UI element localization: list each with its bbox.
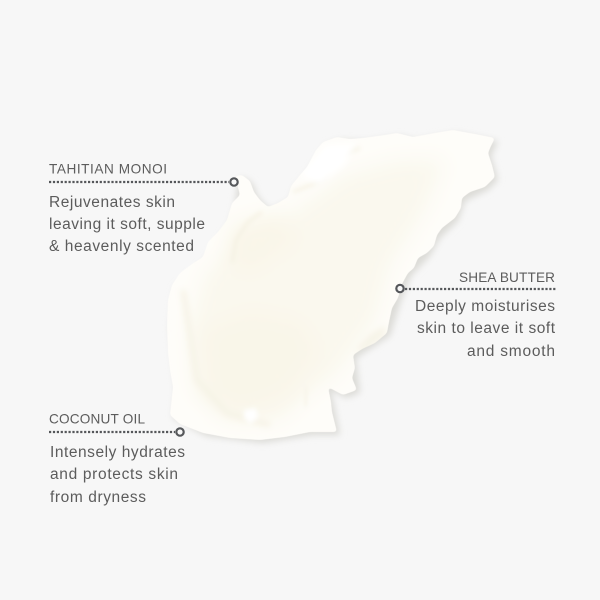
- lower lobe shading: [360, 328, 385, 349]
- description: Coconut Oil: and protects skin: [50, 466, 178, 483]
- description: Coconut Oil: [50, 444, 185, 506]
- description: Tahitian Monoi: Rejuvenates skin: [49, 194, 175, 211]
- description: Shea Butter: [415, 298, 556, 360]
- description: Coconut Oil: from dryness: [50, 489, 146, 506]
- heading: Shea Butter: SHEA BUTTER: [459, 270, 555, 285]
- heading: Coconut Oil: COCONUT OIL: [49, 412, 145, 426]
- description: Shea Butter: skin to leave it soft: [417, 320, 556, 337]
- leader line: Shea Butter: [396, 285, 556, 292]
- rim creases: [258, 214, 259, 215]
- description: Shea Butter: Deeply moisturises: [415, 298, 555, 315]
- heading: Tahitian Monoi: TAHITIAN MONOI: [49, 162, 167, 176]
- soft interior shading: [202, 167, 430, 378]
- callout: Tahitian Monoi: [49, 162, 238, 255]
- peak highlight: [314, 149, 352, 184]
- description: Coconut Oil: Intensely hydrates: [50, 444, 185, 461]
- product swatch: cream smear: [172, 138, 499, 445]
- description: Shea Butter: and smooth: [467, 343, 555, 360]
- callout: Shea Butter: [396, 270, 556, 360]
- callout: Coconut Oil: [49, 412, 185, 506]
- description: Tahitian Monoi: [49, 194, 205, 255]
- leader line: Tahitian Monoi: [49, 178, 238, 186]
- description: Tahitian Monoi: & heavenly scented: [49, 238, 194, 255]
- small highlight: [244, 408, 258, 422]
- leader line: Coconut Oil: [49, 428, 184, 436]
- description: Tahitian Monoi: leaving it soft, supple: [49, 216, 205, 233]
